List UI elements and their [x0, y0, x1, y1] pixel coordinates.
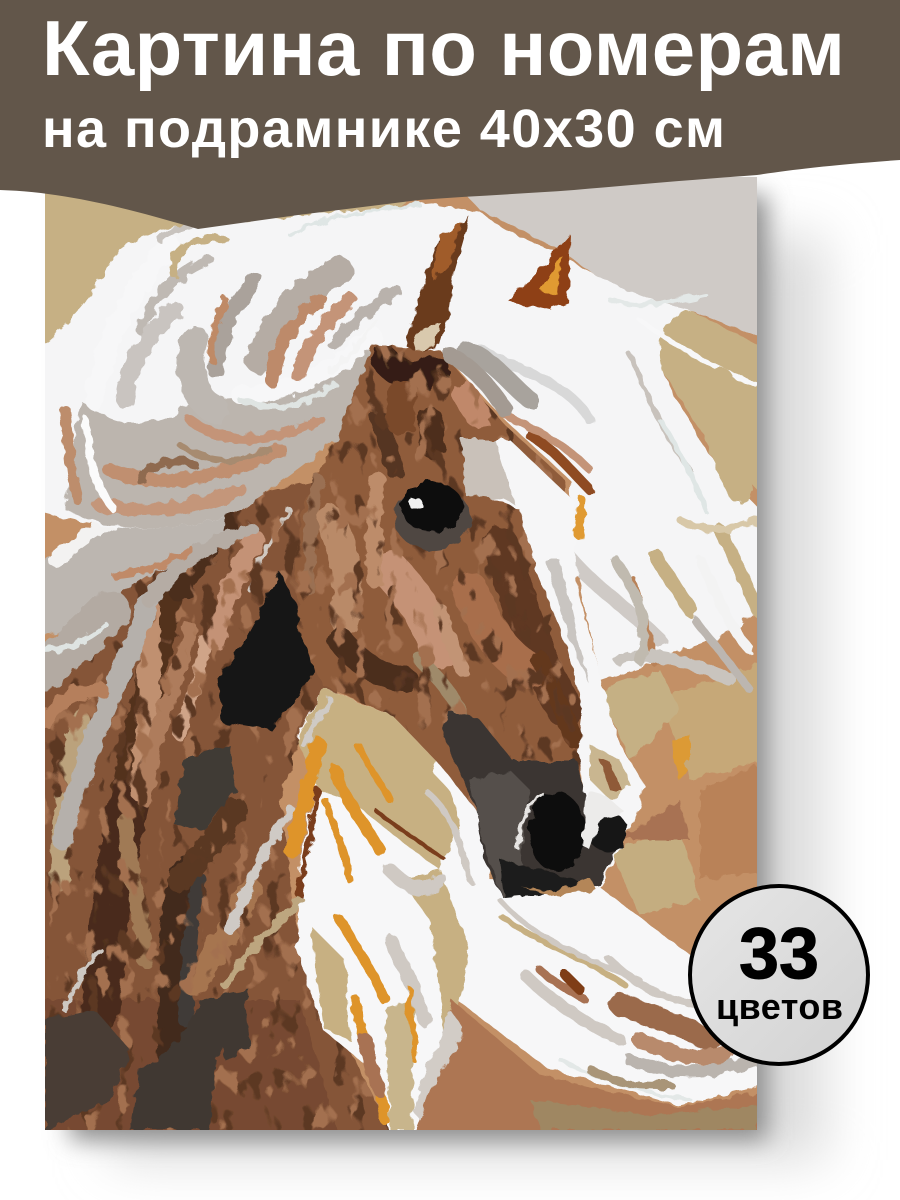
dark neck patch — [218, 572, 315, 730]
painting: horse — [35, 167, 767, 1140]
right mane strands — [465, 295, 757, 690]
neck and chest — [35, 480, 395, 1140]
neck dark shadows — [45, 745, 250, 1130]
horse head — [295, 345, 600, 815]
subtitle: на подрамнике 40х30 см — [42, 99, 725, 159]
badge: 33 colours: 33 — [739, 914, 819, 994]
left mane strands — [45, 515, 250, 1010]
neck dark streaks — [60, 510, 290, 1080]
mane grey underside — [65, 345, 372, 529]
top banner — [0, 0, 900, 229]
canvas shadow — [70, 195, 825, 1160]
lower right brown area — [410, 1000, 767, 1140]
badge: 33 colours — [690, 886, 868, 1064]
white blaze — [450, 355, 645, 891]
upper mane swirl — [35, 203, 767, 690]
lower mane — [225, 688, 767, 1135]
painting background — [35, 167, 767, 1140]
badge: 33 colours: цветов — [716, 986, 843, 1027]
eye — [394, 482, 470, 550]
muzzle and nostril — [443, 710, 628, 898]
title: Картина по номерам — [42, 4, 845, 92]
ears — [405, 217, 571, 352]
